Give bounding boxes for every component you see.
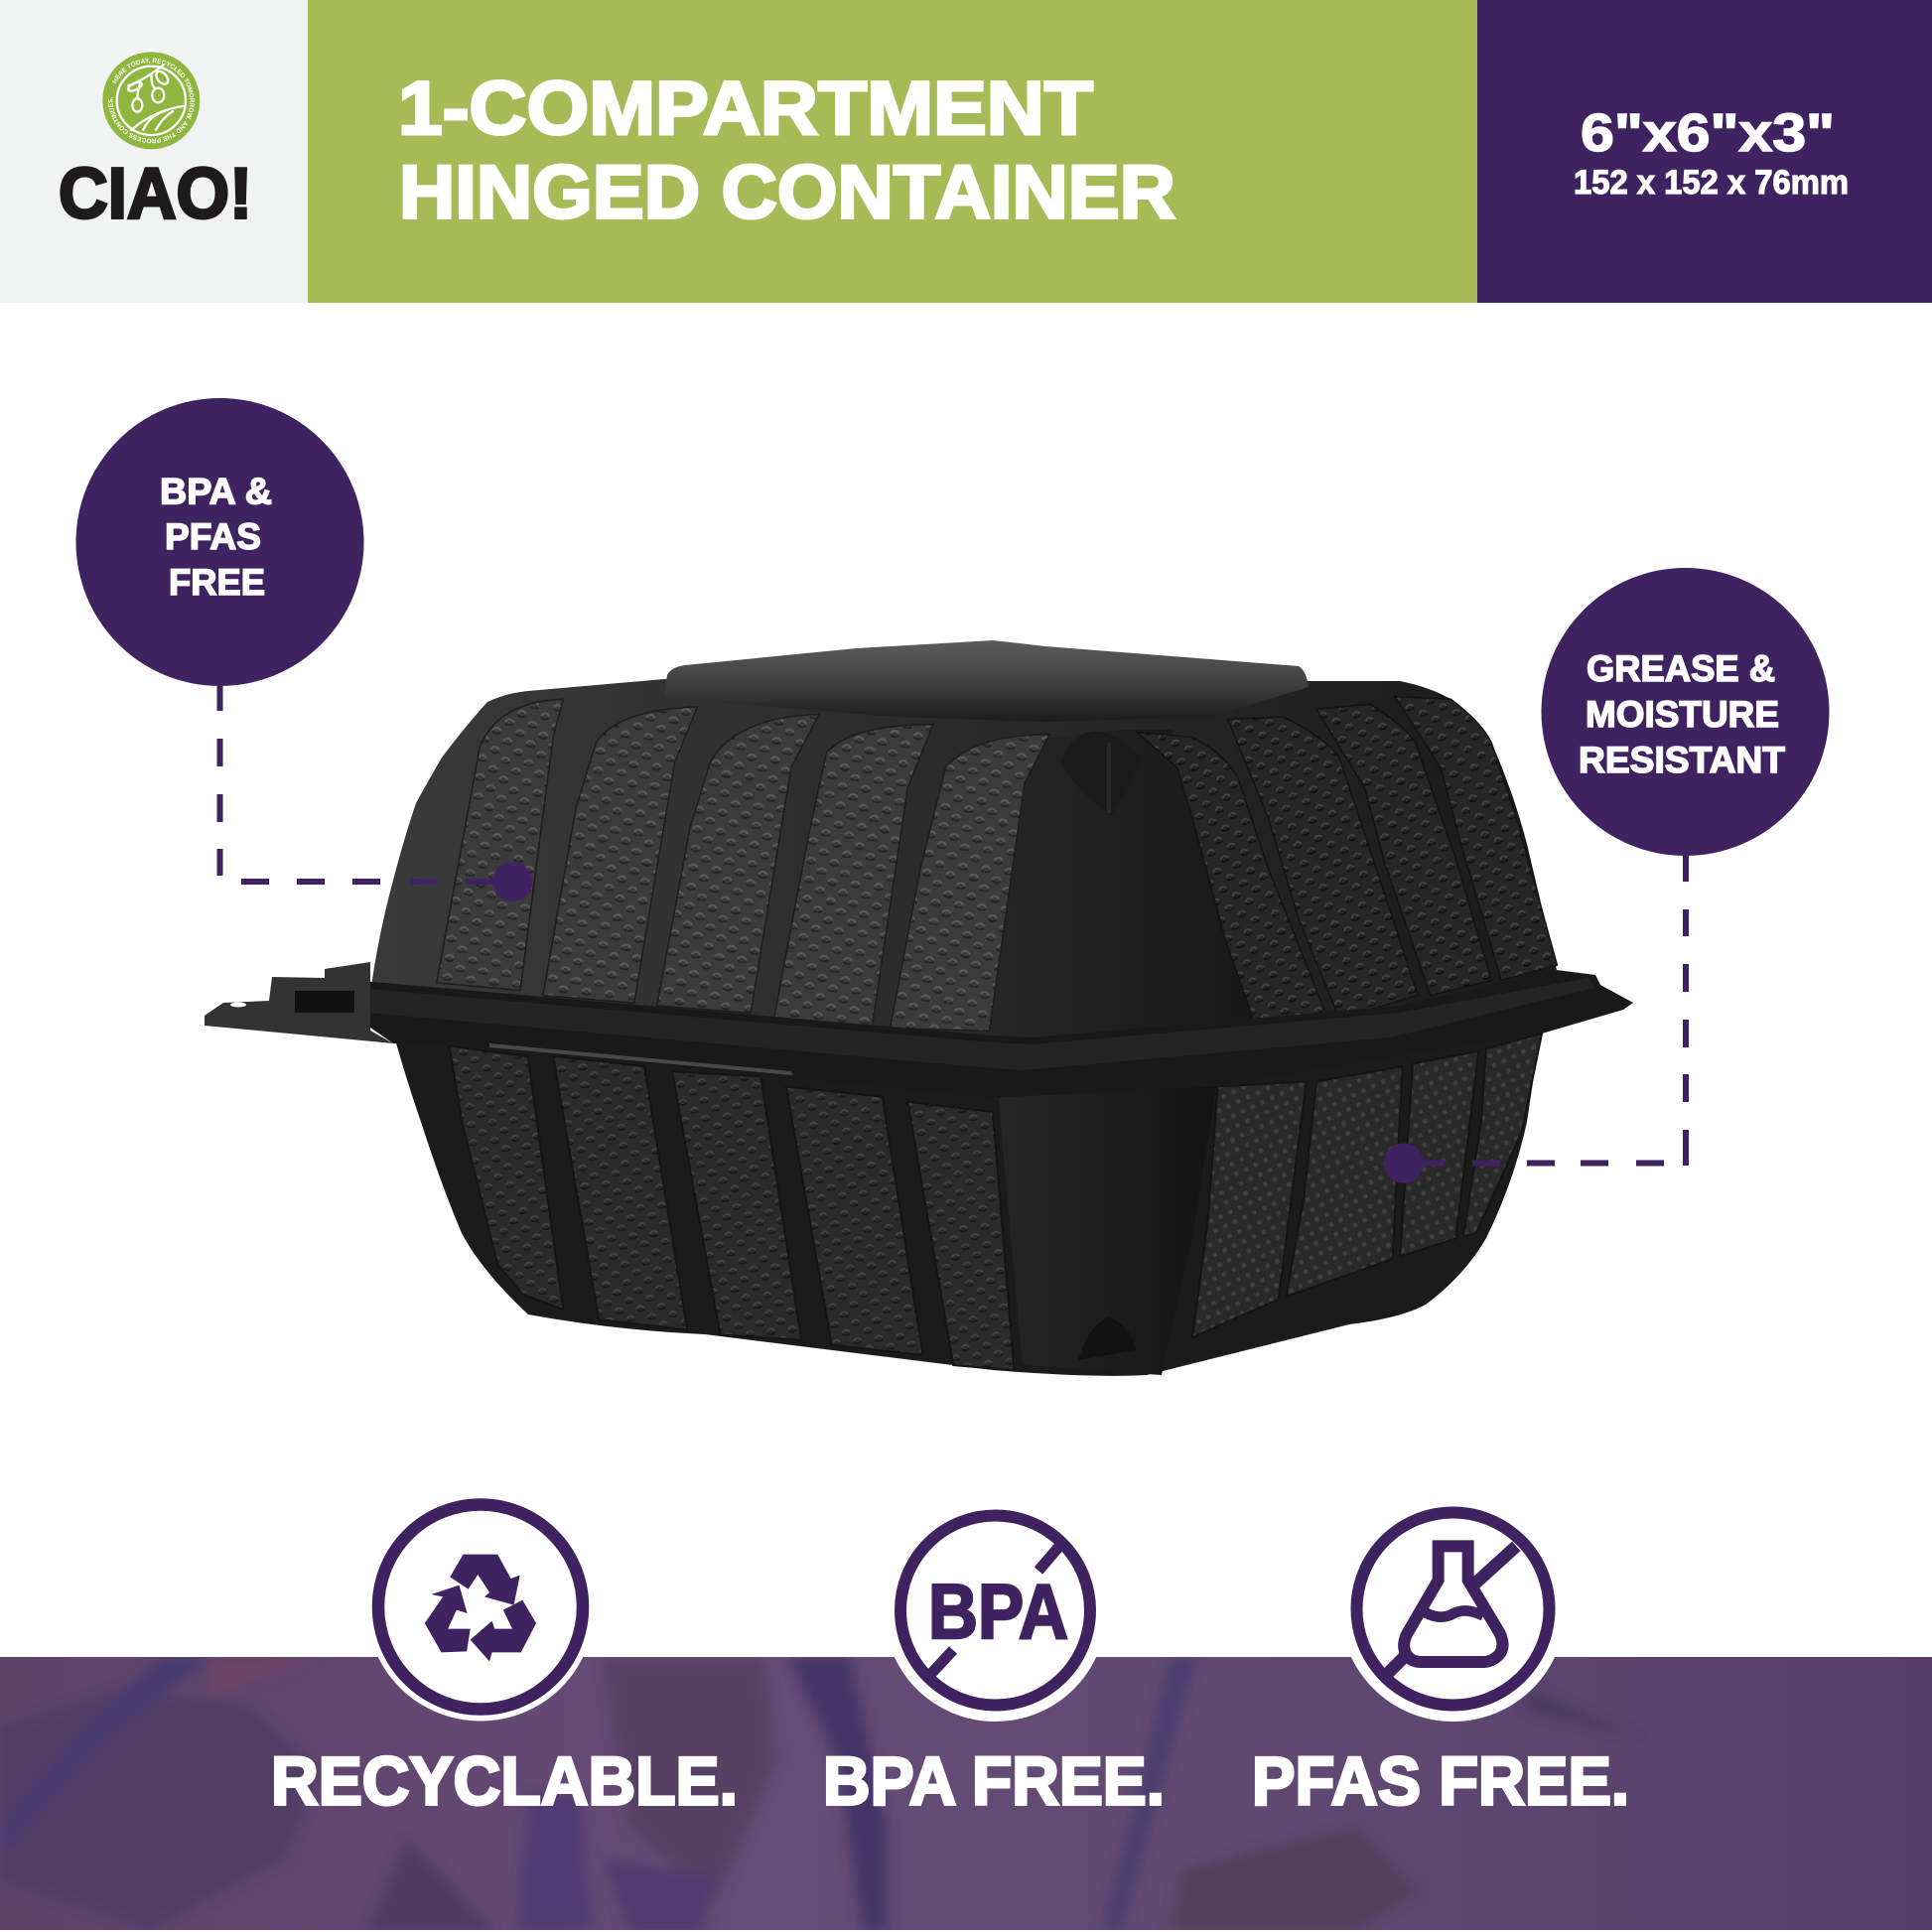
lid textured panels <box>437 699 1049 1031</box>
callout text: GREASE & <box>1587 648 1775 689</box>
lid top plate <box>664 640 1309 722</box>
callout text <box>1579 648 1785 780</box>
latch <box>489 1043 792 1075</box>
dashed leader right <box>1415 854 1686 1166</box>
rim band <box>360 970 1633 1098</box>
callout bubble right <box>1541 568 1829 856</box>
title panel <box>308 0 1477 303</box>
callout text: PFAS <box>165 516 261 557</box>
leader dot left <box>492 862 532 901</box>
header bar <box>0 0 1932 303</box>
callout text: FREE <box>169 562 265 603</box>
label: PFAS free: PFAS FREE. <box>1252 1743 1629 1819</box>
dashed leader left <box>220 686 496 882</box>
logo badge: HERE TODAY, RECYCLED TOMORROW, AND THE PROCESS CONTINUES. <box>107 58 195 143</box>
callout text <box>160 471 272 603</box>
icon: recyclable <box>366 1493 595 1722</box>
lid corner smooth face <box>988 730 1325 1042</box>
title line 2: HINGED CONTAINER <box>399 151 1175 234</box>
logo panel <box>0 0 308 303</box>
flask with strike line <box>1388 1546 1516 1673</box>
lower tray body <box>393 1023 1542 1376</box>
label: BPA free: BPA FREE. <box>823 1743 1165 1819</box>
callout: grease and moisture resistant <box>1384 568 1829 1183</box>
tab hole <box>230 1003 246 1007</box>
footer band with leaf background <box>0 1657 1932 1930</box>
hinge bracket <box>295 991 354 1013</box>
size panel <box>1477 0 1932 303</box>
rim highlight band <box>367 978 1594 1070</box>
footer labels <box>271 1743 1629 1819</box>
brand name: CIAO! <box>59 155 252 234</box>
product photo: black hinged container <box>205 640 1633 1376</box>
icon: PFAS free <box>1340 1496 1566 1722</box>
size in millimetres: 152 x 152 x 76mm <box>1574 164 1849 202</box>
callout text: RESISTANT <box>1579 740 1785 780</box>
leader dot right <box>1384 1144 1424 1183</box>
lid right-hand panels <box>1060 697 1557 1034</box>
recycling arrows <box>425 1555 536 1661</box>
label: recyclable: RECYCLABLE. <box>271 1743 738 1819</box>
callout: BPA and PFAS free <box>75 398 532 901</box>
tray right-hand panels <box>1078 1034 1542 1360</box>
callout text: BPA & <box>160 471 272 512</box>
title line 1: 1-COMPARTMENT <box>398 67 1093 151</box>
hinge tab <box>205 962 393 1043</box>
lower smooth corner <box>998 1082 1217 1375</box>
size in inches: 6"x6"x3" <box>1581 103 1835 163</box>
lid body <box>370 655 1557 1052</box>
callout bubble left <box>75 398 363 686</box>
strike line <box>927 1543 1062 1678</box>
icon: BPA free <box>884 1499 1106 1722</box>
BPA lettering: BPA <box>928 1568 1068 1655</box>
tray textured panels <box>450 1046 1014 1370</box>
callout text: MOISTURE <box>1586 694 1779 735</box>
